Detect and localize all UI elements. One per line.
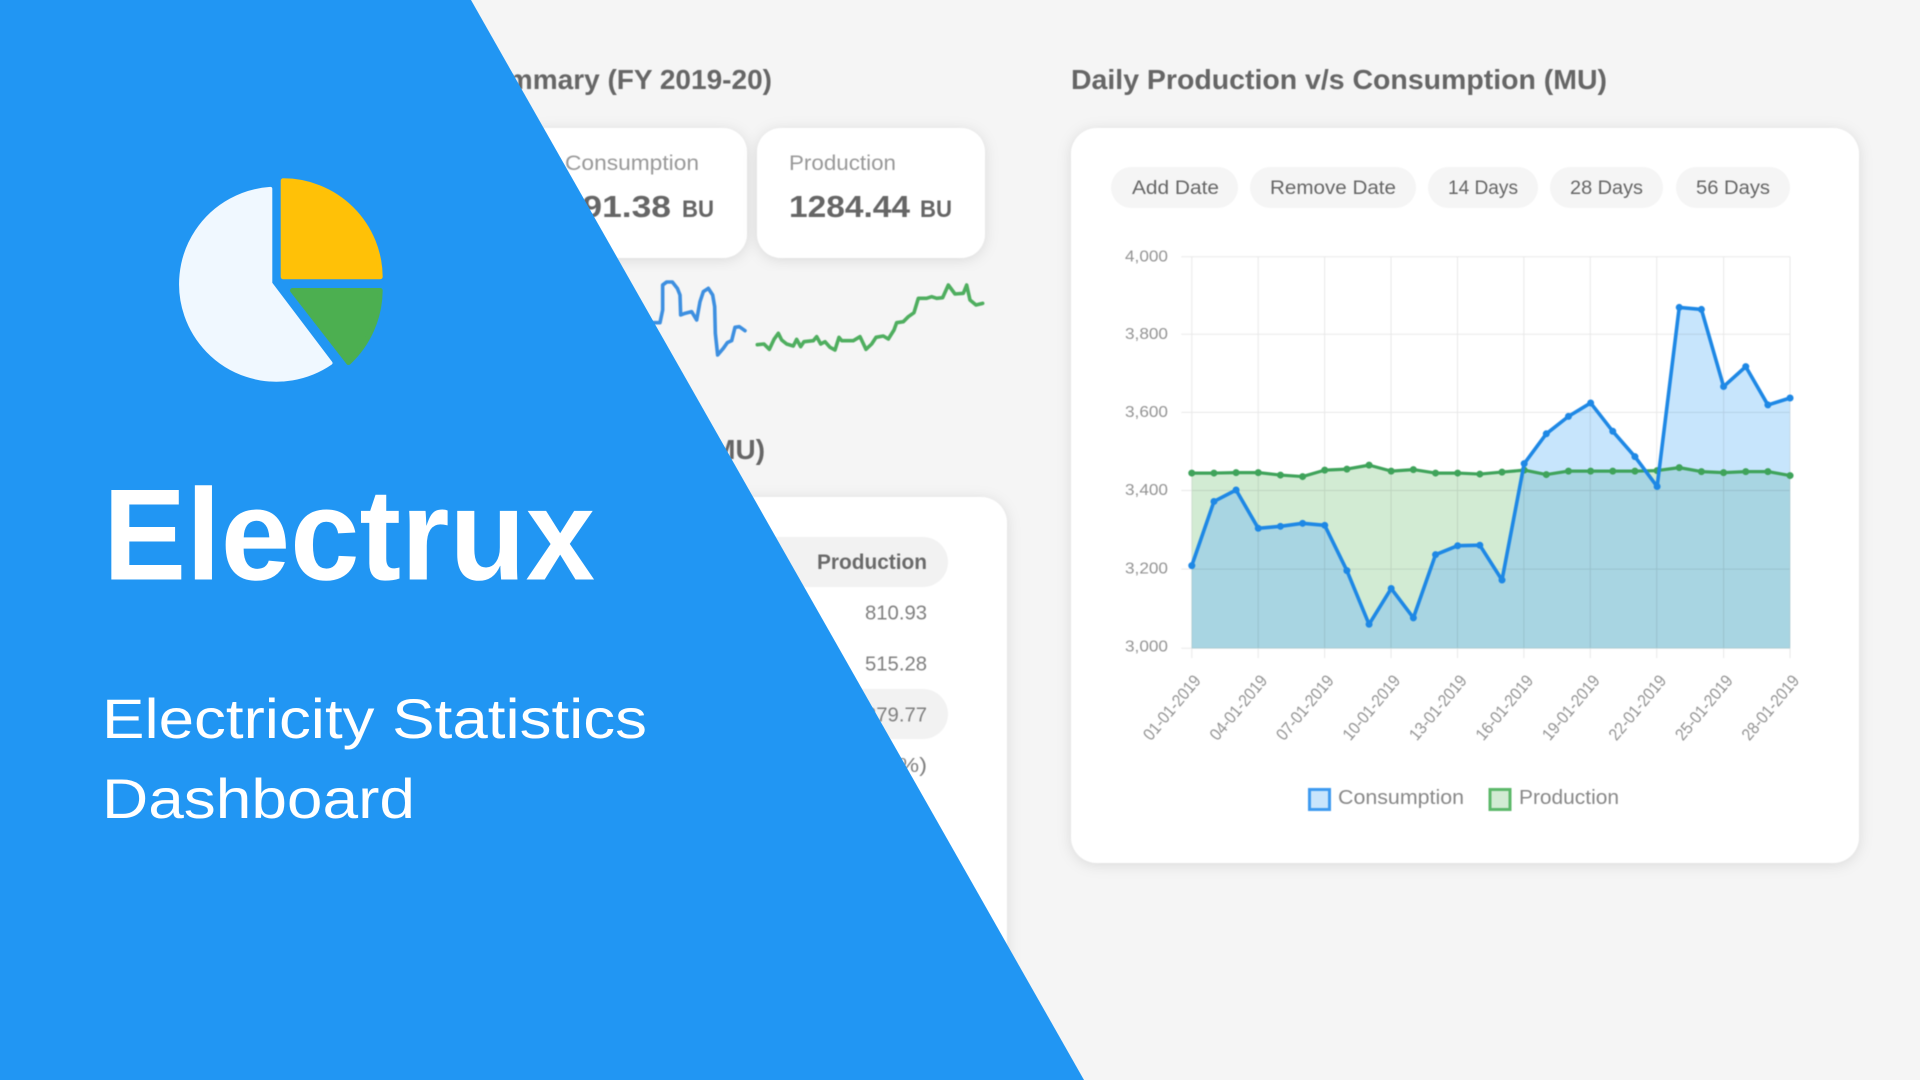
- button: 28 days: 28 Days: [1570, 178, 1643, 199]
- subtitle: Electricity Statistics: [102, 687, 647, 750]
- panel: consumption card: 1291.38: [543, 189, 671, 224]
- dashboard screenshot: [513, 68, 1862, 950]
- x axis labels: 16-01-2019: [1472, 671, 1537, 744]
- panel: production card: BU: [920, 196, 952, 223]
- y axis labels: 4,000: [1125, 248, 1168, 266]
- pie slice: white: [181, 189, 330, 380]
- button: remove date: [1250, 167, 1416, 208]
- y axis labels: [1125, 248, 1168, 656]
- area: production: [1192, 465, 1790, 648]
- subtitle: [102, 687, 647, 830]
- button: 28 days: [1550, 167, 1663, 208]
- pie slice: green: [292, 290, 380, 362]
- button: remove date: Remove Date: [1270, 178, 1396, 199]
- icon: pie chart: [181, 181, 380, 380]
- x axis labels: 22-01-2019: [1605, 671, 1670, 744]
- button: 14 days: [1428, 167, 1538, 208]
- area: consumption: [1192, 307, 1790, 648]
- panel: table: [520, 497, 1007, 1057]
- heading: summary: Summary (FY 2019-20): [472, 64, 772, 95]
- panel: consumption card: [520, 128, 747, 258]
- area: overlap: [1192, 307, 1790, 648]
- table values: 810.93: [865, 602, 927, 624]
- panel: consumption card: BU: [682, 196, 714, 223]
- y axis labels: 3,000: [1125, 638, 1168, 656]
- table values: 279.77: [865, 704, 927, 726]
- y axis labels: 3,200: [1125, 560, 1168, 578]
- button: 56 days: [1676, 167, 1790, 208]
- sparkline: production: [757, 285, 983, 350]
- line chart: [1125, 248, 1803, 810]
- sparkline: consumption: [650, 282, 745, 355]
- table values: 515.28: [865, 654, 927, 676]
- x axis labels: [1139, 671, 1803, 744]
- x axis labels: 19-01-2019: [1538, 671, 1604, 744]
- title: Electrux: [103, 462, 595, 608]
- blue diagonal panel: [0, 0, 1084, 1080]
- legend: [1310, 787, 1619, 810]
- plot areas and lines: [1181, 257, 1790, 658]
- x axis labels: 04-01-2019: [1206, 671, 1271, 744]
- heading: daily production vs consumption: Daily Production v/s Consumption (MU): [1071, 64, 1607, 95]
- line: production: [1192, 465, 1790, 477]
- table values: %): [898, 755, 927, 777]
- table values: [540, 602, 948, 777]
- table header row: Production: [817, 551, 927, 574]
- x axis labels: 07-01-2019: [1272, 671, 1338, 744]
- y axis labels: 3,800: [1125, 326, 1168, 343]
- pie slice: yellow: [283, 181, 380, 277]
- heading: table: (MU): [703, 434, 765, 465]
- table header row: [540, 537, 948, 587]
- panel: production card: 1284.44: [789, 189, 911, 224]
- x axis labels: 01-01-2019: [1139, 671, 1205, 744]
- y axis labels: 3,400: [1125, 482, 1168, 499]
- x axis labels: 25-01-2019: [1671, 671, 1737, 744]
- y axis labels: 3,600: [1125, 404, 1168, 421]
- legend: Production: [1519, 787, 1619, 809]
- button: add date: Add Date: [1132, 178, 1219, 199]
- panel: production card: [757, 128, 985, 258]
- legend: Consumption: [1338, 787, 1464, 809]
- x axis labels: 13-01-2019: [1405, 671, 1471, 744]
- button: 56 days: 56 Days: [1696, 178, 1770, 199]
- panel: daily chart card: [1071, 128, 1859, 863]
- panel: production card: Production: [789, 152, 896, 175]
- x axis labels: 28-01-2019: [1738, 671, 1803, 744]
- panel: consumption card: Consumption: [565, 152, 699, 175]
- button: 14 days: 14 Days: [1448, 178, 1518, 199]
- button: add date: [1111, 167, 1238, 208]
- subtitle: Dashboard: [102, 767, 415, 830]
- x axis labels: 10-01-2019: [1339, 671, 1404, 744]
- line: consumption: [1192, 307, 1790, 624]
